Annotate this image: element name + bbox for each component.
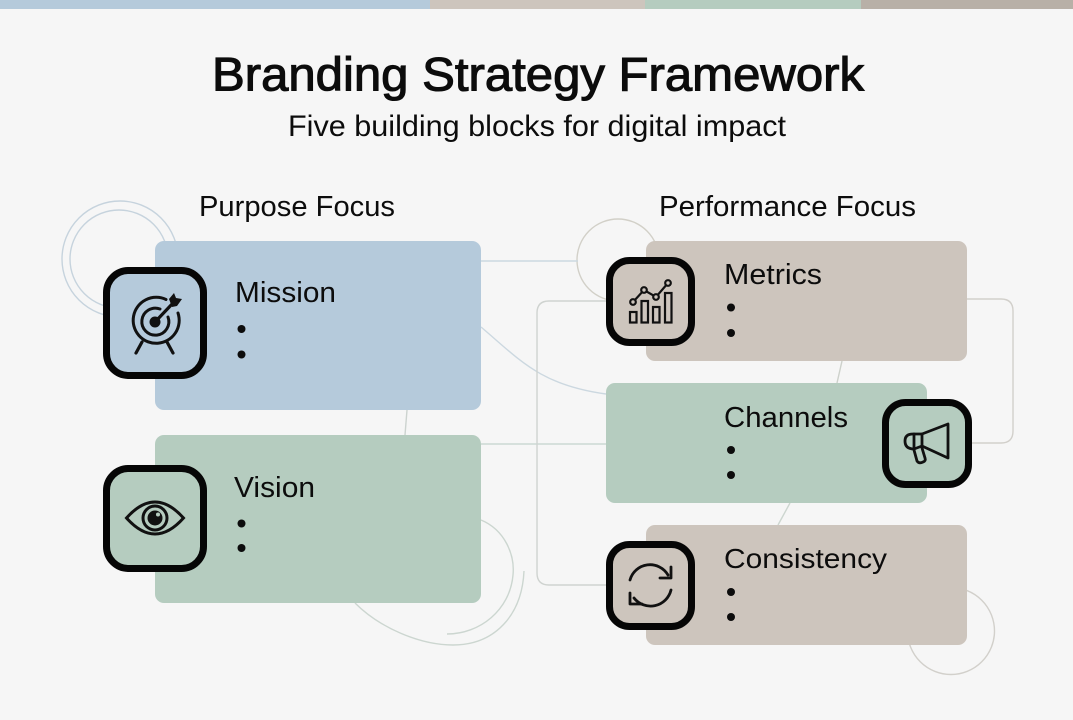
heading: performance focus: Performance Focus bbox=[659, 191, 916, 223]
connector lines and decorative arcs bbox=[62, 201, 1013, 674]
heading: purpose focus: Purpose Focus bbox=[199, 191, 395, 223]
consistency bullets bbox=[727, 588, 735, 621]
subtitle: Five building blocks for digital impact bbox=[288, 110, 787, 143]
icon: bar and line chart bbox=[610, 260, 692, 342]
panel: vision bbox=[106, 435, 481, 603]
panel: consistency bbox=[610, 525, 967, 645]
icon: megaphone bbox=[886, 402, 968, 484]
panel: mission bbox=[106, 241, 481, 410]
channels bullets bbox=[727, 446, 735, 479]
top colour bar bbox=[0, 0, 1073, 9]
metrics label: Metrics bbox=[724, 259, 822, 291]
title: Branding Strategy Framework bbox=[212, 48, 864, 102]
mission label: Mission bbox=[235, 277, 336, 309]
consistency label: Consistency bbox=[724, 543, 887, 574]
panel: channels bbox=[606, 383, 968, 503]
icon: eye bbox=[106, 468, 204, 568]
icon: target with arrow bbox=[106, 270, 204, 376]
panel: metrics bbox=[610, 241, 967, 361]
channels label: Channels bbox=[724, 402, 848, 434]
icon: sync arrows bbox=[610, 544, 692, 626]
metrics bullets bbox=[727, 304, 735, 337]
vision bullets bbox=[238, 520, 246, 552]
mission bullets bbox=[238, 325, 246, 358]
vision label: Vision bbox=[234, 472, 315, 504]
